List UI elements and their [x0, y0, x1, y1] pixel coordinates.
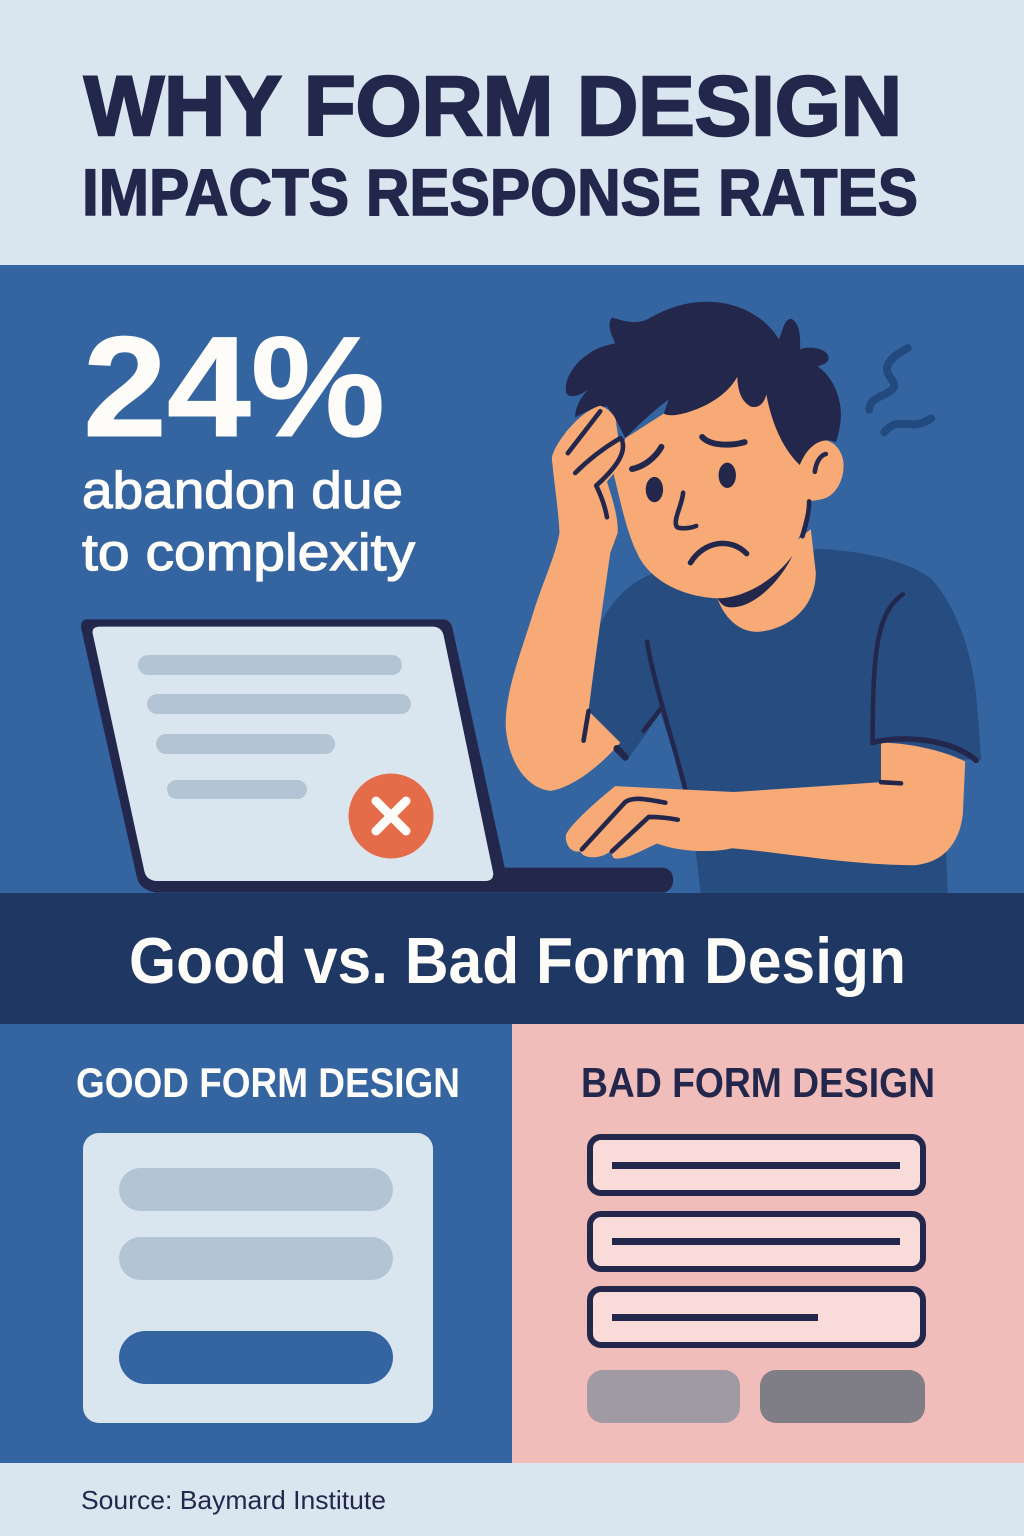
good heading: GOOD FORM DESIGN [76, 1059, 460, 1106]
hair [566, 302, 841, 465]
hero panel [0, 265, 1024, 893]
section banner [0, 893, 1024, 1024]
shirt [589, 549, 981, 893]
forearm and hand on desk [566, 743, 965, 865]
source note: Source: Baymard Institute [81, 1485, 386, 1515]
stat caption [82, 462, 415, 582]
title line 2: IMPACTS RESPONSE RATES [82, 155, 918, 229]
footer panel [0, 1463, 1024, 1536]
bad form fields [590, 1137, 923, 1345]
stat caption: abandon due [82, 462, 403, 520]
neck [717, 529, 816, 632]
laptop with error form [81, 619, 673, 893]
banner heading: Good vs. Bad Form Design [129, 924, 906, 997]
face and line details [568, 411, 976, 851]
icon: error cross [348, 774, 434, 858]
illustration: frustrated person [506, 302, 981, 893]
stat: 24 percent: 24% [83, 308, 385, 467]
bad heading: BAD FORM DESIGN [581, 1059, 935, 1106]
panel: good form design [0, 1024, 512, 1463]
title line 1: WHY FORM DESIGN [84, 59, 902, 153]
good form card [83, 1133, 433, 1423]
bad form buttons [587, 1370, 925, 1423]
stat caption: to complexity [82, 524, 415, 582]
icon: stress squiggles [869, 348, 931, 432]
panel: bad form design [512, 1024, 1024, 1463]
head [614, 377, 844, 598]
header panel [0, 0, 1024, 265]
raised arm and hand [506, 406, 624, 791]
